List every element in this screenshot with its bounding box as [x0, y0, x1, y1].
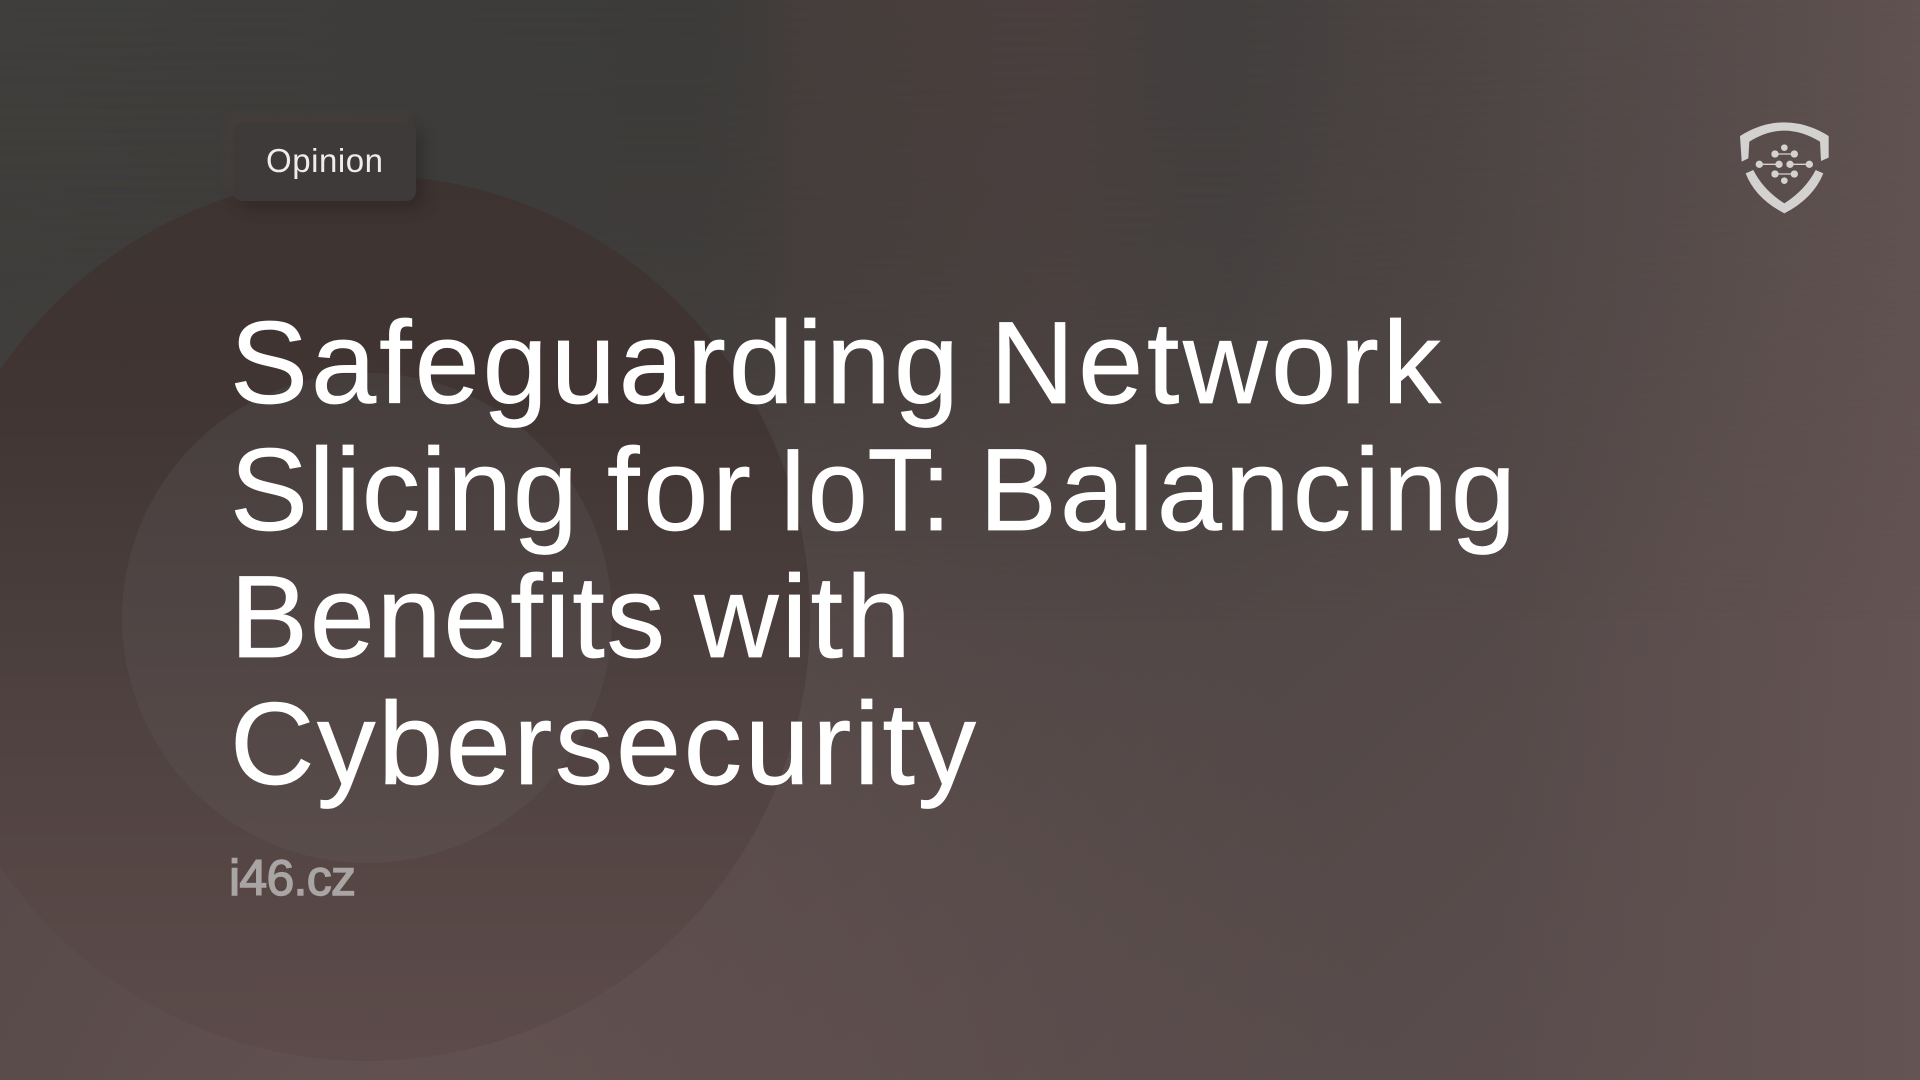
title: Cybersecurity: [230, 678, 976, 809]
badge label: Opinion: [266, 142, 383, 179]
title: Safeguarding: [230, 297, 959, 428]
title: for: [607, 424, 751, 555]
title: Slicing: [230, 424, 578, 555]
title: Network: [990, 297, 1442, 428]
title: Benefits: [230, 551, 665, 682]
title: [230, 297, 1516, 809]
title: with: [693, 551, 911, 682]
background small circle: [122, 373, 612, 863]
icon: shield logo: [1740, 122, 1829, 213]
background large circle: [0, 175, 810, 1061]
badge: Opinion: [233, 122, 416, 201]
title: Balancing: [979, 424, 1516, 555]
source label: i46.cz: [229, 850, 356, 906]
title: IoT:: [778, 424, 951, 555]
